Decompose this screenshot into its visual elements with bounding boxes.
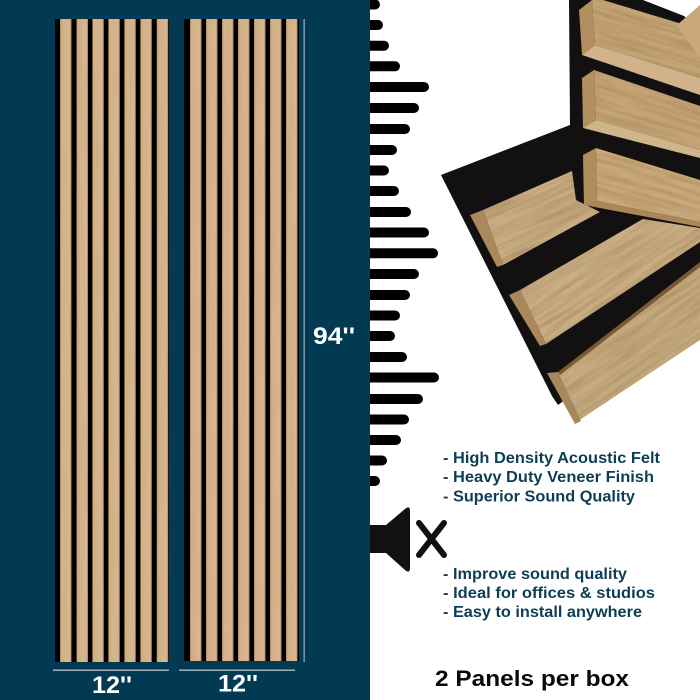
dimension line: second panel width <box>179 670 295 671</box>
panel: first slat panel <box>55 19 169 662</box>
dimension line: first panel width <box>53 670 169 671</box>
icon: muted speaker <box>370 507 444 572</box>
lower slat C <box>547 262 700 424</box>
panel: navy background <box>0 0 370 700</box>
feature list <box>443 450 660 506</box>
dimension label: first panel 12 inches: 12'' <box>92 672 132 699</box>
upper slat 1 <box>579 0 700 95</box>
feature list: - Superior Sound Quality <box>443 488 635 506</box>
top-right slat corner <box>677 5 700 58</box>
feature list: - High Density Acoustic Felt <box>443 450 660 467</box>
upper slat 2 <box>582 70 700 158</box>
benefits list: - Improve sound quality <box>443 566 627 583</box>
box contents caption: 2 Panels per box <box>435 666 630 691</box>
upper slat 3 <box>583 148 700 227</box>
sound wave bars <box>365 4 434 481</box>
felt backing <box>441 0 700 405</box>
navy edge over bars <box>360 0 370 500</box>
lower slat B <box>509 219 700 346</box>
dimension line: height <box>304 19 305 662</box>
dimension label: second panel 12 inches: 12'' <box>218 670 258 698</box>
dimension label: 94 inches: 94'' <box>313 323 355 350</box>
benefits list: - Ideal for offices & studios <box>443 585 655 602</box>
product photo: wood slat close-up <box>441 0 700 424</box>
benefits list: - Easy to install anywhere <box>443 604 642 621</box>
lower slat A <box>470 171 600 267</box>
feature list: - Heavy Duty Veneer Finish <box>443 469 654 486</box>
panel: second slat panel <box>184 19 299 661</box>
benefits list <box>443 566 655 621</box>
